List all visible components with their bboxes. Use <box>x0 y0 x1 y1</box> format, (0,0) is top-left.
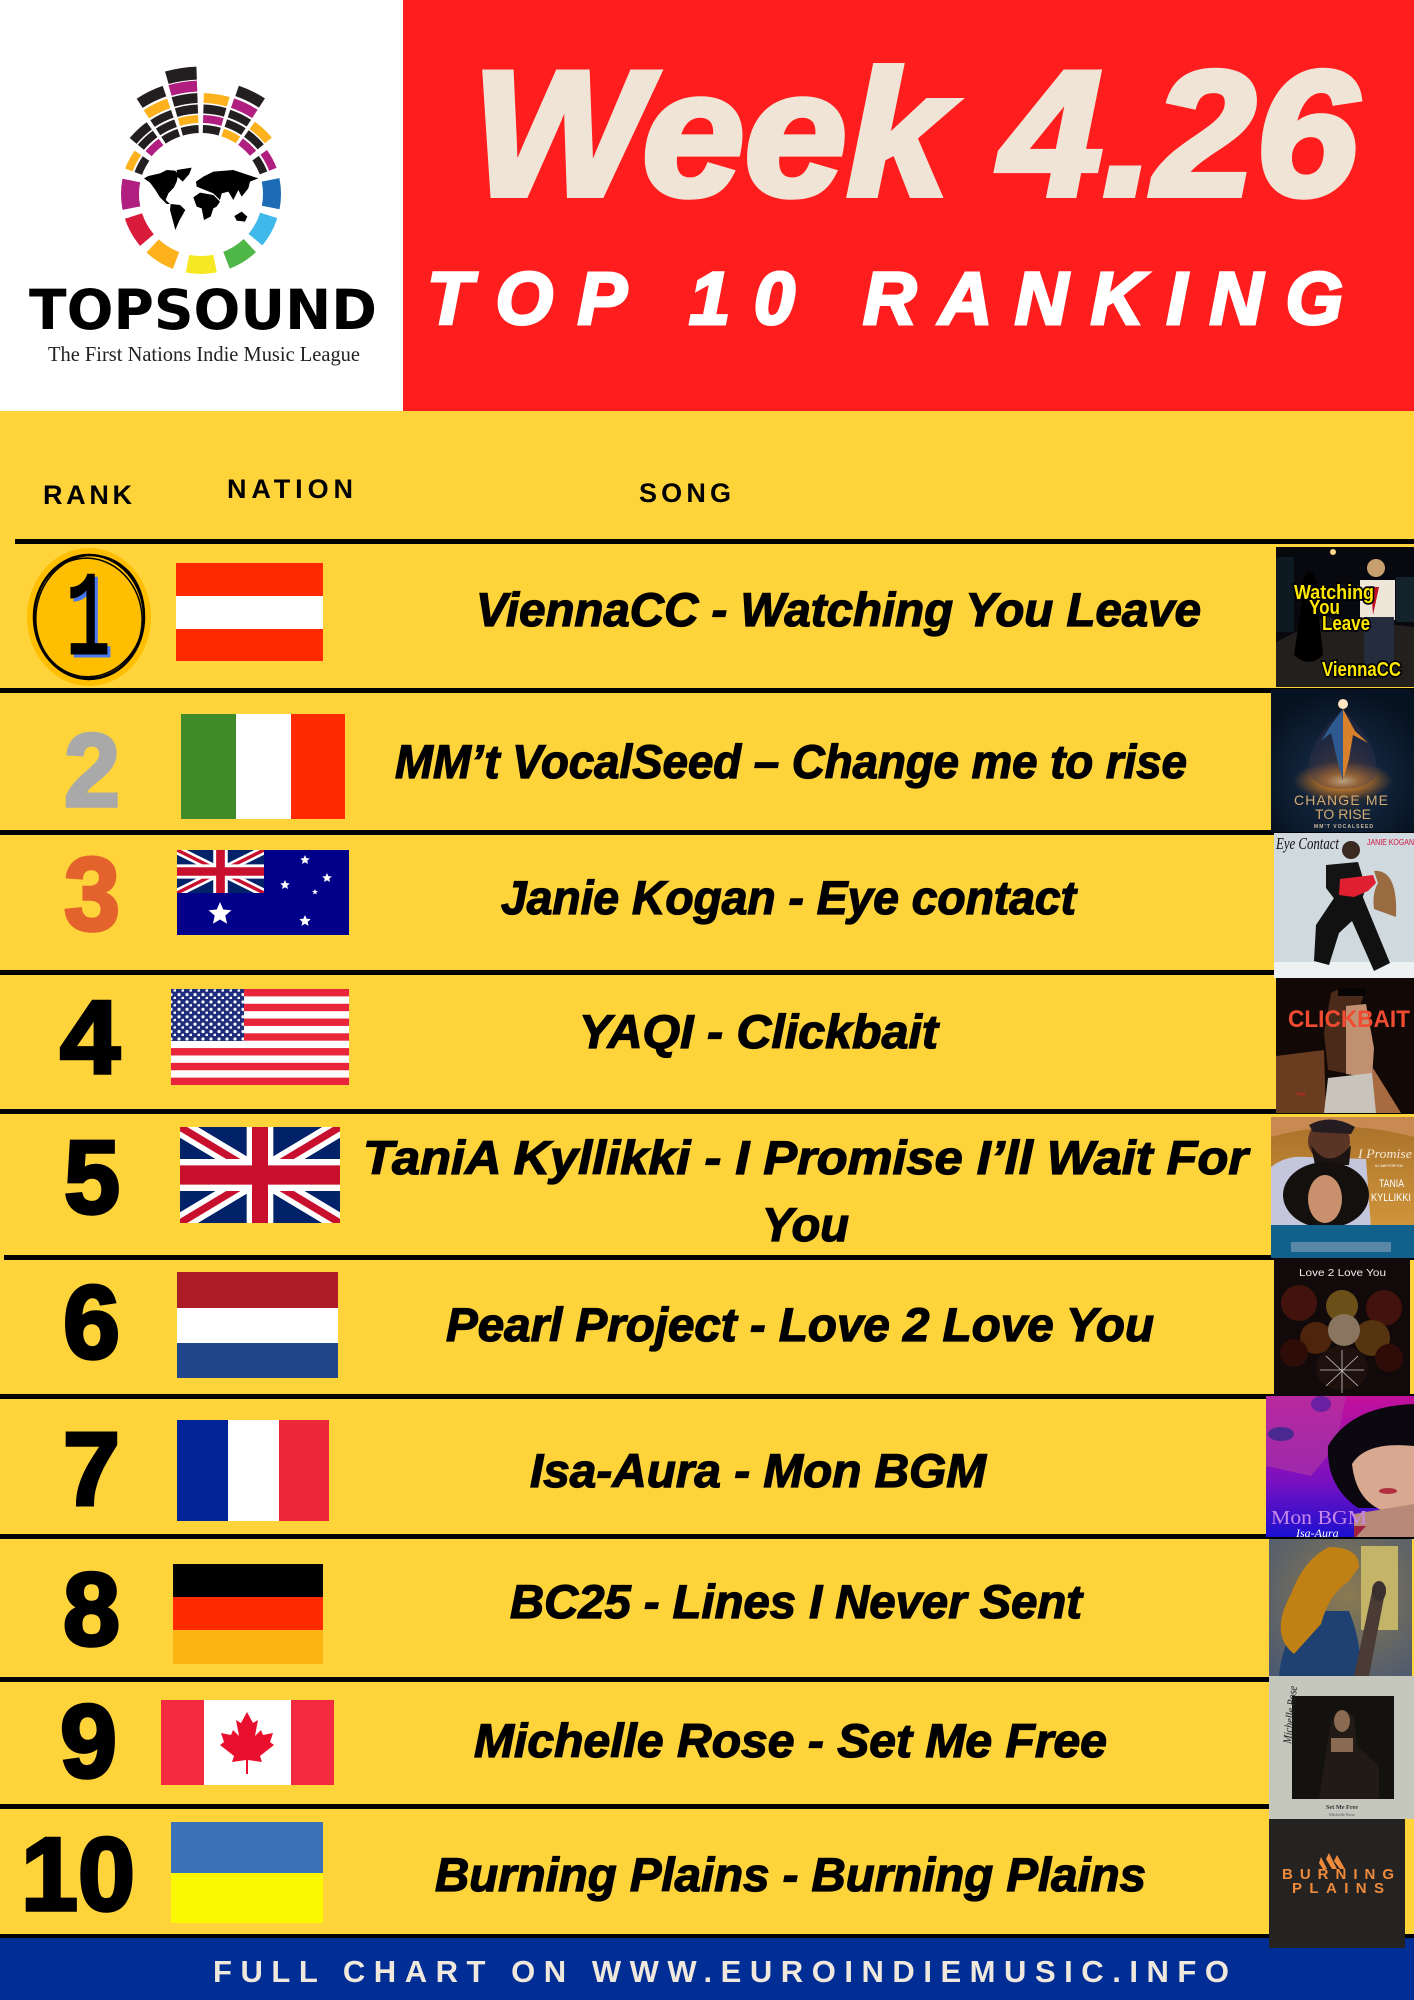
flag: France <box>177 1420 329 1521</box>
rank 10: 10 <box>21 1817 135 1933</box>
cover 8 <box>1269 1539 1412 1676</box>
cover 3: Eye Contact <box>1275 834 1340 853</box>
cover 2: TO RISE <box>1315 806 1371 822</box>
row 10 <box>21 1817 1405 1948</box>
footer bar <box>0 1938 1414 2000</box>
subtitle: top 10 ranking <box>427 257 1343 340</box>
flag: Canada <box>161 1700 334 1785</box>
cover 7: Isa-Aura <box>1295 1526 1339 1540</box>
row 4 <box>60 978 1414 1113</box>
panel: logo <box>0 0 403 411</box>
song 1: ViennaCC - Watching You Leave <box>476 583 1201 636</box>
cover 10: PLAINS <box>1292 1880 1384 1897</box>
cover 10: BURNING <box>1282 1866 1394 1883</box>
heading: rank: RANK <box>43 480 132 510</box>
footer text: FULL CHART ON WWW.EUROINDIEMUSIC.INFO <box>213 1954 1229 1989</box>
song 8: BC25 - Lines I Never Sent <box>510 1575 1084 1628</box>
cover 2: CHANGE ME <box>1294 792 1388 808</box>
cover 10 <box>1269 1819 1405 1948</box>
title: week: Week 4.26 <box>472 34 1359 233</box>
cover 2: MM'T VOCALSEED <box>1314 824 1373 830</box>
rank 5: 5 <box>64 1120 120 1236</box>
cover 2 <box>1271 689 1414 832</box>
flag: Australia <box>177 850 349 935</box>
flag: Italy <box>181 714 345 819</box>
rank 9: 9 <box>60 1684 117 1800</box>
rank 7: 7 <box>63 1412 120 1528</box>
song 10: Burning Plains - Burning Plains <box>435 1848 1146 1901</box>
panel: title banner <box>403 0 1414 411</box>
cover 4 <box>1276 978 1414 1113</box>
song 6: Pearl Project - Love 2 Love You <box>446 1298 1154 1351</box>
flag: United Kingdom <box>180 1127 340 1223</box>
cover 7: Mon BGM <box>1271 1507 1367 1529</box>
cover 6 <box>1274 1258 1410 1396</box>
logo emblem <box>46 42 356 352</box>
heading: nation: NATION <box>227 474 353 504</box>
row 2 <box>64 689 1414 832</box>
cover 1: You <box>1309 597 1340 619</box>
cover 9: Michelle Rose <box>1329 1812 1355 1817</box>
row 7 <box>63 1396 1414 1540</box>
flag: Ukraine <box>171 1822 323 1923</box>
rank 8: 8 <box>63 1552 120 1668</box>
cover 4: YAQI <box>1296 1091 1305 1096</box>
cover 5 <box>1271 1117 1414 1258</box>
world map <box>144 168 258 230</box>
subtitle: top 10 ranking: TOP <box>427 257 628 340</box>
row 3 <box>64 833 1414 978</box>
cover 6: Love 2 Love You <box>1299 1268 1386 1279</box>
cover 5: I Promise <box>1357 1146 1412 1161</box>
rank 6: 6 <box>63 1265 120 1381</box>
cover 9 <box>1269 1676 1414 1819</box>
row 8 <box>63 1539 1412 1676</box>
rank 1 badge <box>26 547 154 692</box>
logo wordmark: TOPSOUND <box>29 278 377 342</box>
cover 1 <box>1276 547 1414 687</box>
cover 1: Watching <box>1294 582 1374 604</box>
row 6 <box>63 1258 1410 1396</box>
table headings <box>43 474 731 510</box>
rank 4: 4 <box>60 980 120 1096</box>
song 7: Isa-Aura - Mon BGM <box>530 1444 987 1497</box>
flag: USA <box>171 989 349 1085</box>
rank 2: 2 <box>64 713 120 829</box>
song 9: Michelle Rose - Set Me Free <box>474 1714 1107 1767</box>
row 1 <box>26 547 1414 692</box>
cover 3 <box>1274 833 1414 978</box>
cover 1: ViennaCC <box>1322 659 1401 681</box>
song 2: MM’t VocalSeed – Change me to rise <box>395 735 1187 788</box>
cover 5: I'LL WAIT FOR YOU <box>1375 1164 1403 1168</box>
song 3: Janie Kogan - Eye contact <box>501 871 1078 924</box>
song 5: You <box>762 1198 849 1251</box>
heading: song: SONG <box>639 478 731 508</box>
cover 9: Michelle Rose <box>1280 1685 1300 1745</box>
flag: Austria <box>176 563 323 661</box>
subtitle: top 10 ranking: RANKING <box>863 257 1343 340</box>
cover 7 <box>1266 1396 1414 1540</box>
rank 3: 3 <box>64 837 120 953</box>
rank 1 badge: 1 <box>69 559 113 692</box>
row 9 <box>60 1676 1414 1819</box>
flag: Germany <box>173 1564 323 1664</box>
song 5 <box>363 1131 1251 1251</box>
row 5 <box>64 1117 1414 1258</box>
subtitle: top 10 ranking: 10 <box>689 257 795 340</box>
song 5: TaniA Kyllikki - I Promise I’ll Wait For <box>363 1131 1251 1184</box>
cover 1: Leave <box>1322 613 1370 635</box>
cover 4: CLICKBAIT <box>1288 1006 1410 1033</box>
colour ring <box>101 94 301 294</box>
cover 9: Set Me Free <box>1326 1805 1358 1811</box>
logo tagline: The First Nations Indie Music League <box>48 342 360 366</box>
equalizer arcs <box>46 42 356 352</box>
rank 1 badge: 1 <box>66 556 110 689</box>
song 4: YAQI - Clickbait <box>579 1005 940 1058</box>
flag: Netherlands <box>177 1272 338 1378</box>
cover 5: TANIA <box>1379 1178 1405 1190</box>
